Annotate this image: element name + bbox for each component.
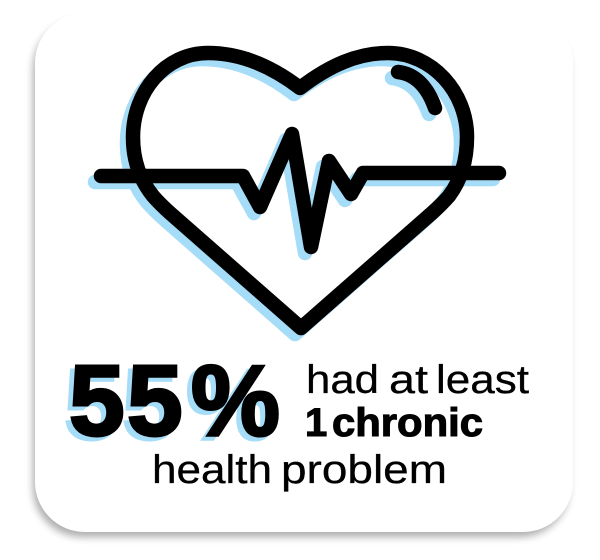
- icon shadow: light blue offset: [95, 59, 493, 334]
- text: health problem: [152, 448, 447, 492]
- icon: heart with heartbeat line: [95, 53, 499, 334]
- statistic: 55%: 55%: [69, 345, 280, 457]
- icon outline: black heart: [101, 53, 499, 328]
- text: had at least: at: [389, 358, 428, 402]
- text: had at least: least: [436, 358, 529, 402]
- statistic: 55%: 55%: [64, 349, 275, 461]
- text: had at least: had: [306, 358, 379, 402]
- text: health problem: problem: [281, 448, 447, 492]
- text: health problem: health: [152, 448, 272, 492]
- text: 1 chronic: 1: [305, 401, 327, 445]
- text: 1 chronic: chronic: [332, 401, 483, 445]
- text: had at least: [306, 358, 529, 402]
